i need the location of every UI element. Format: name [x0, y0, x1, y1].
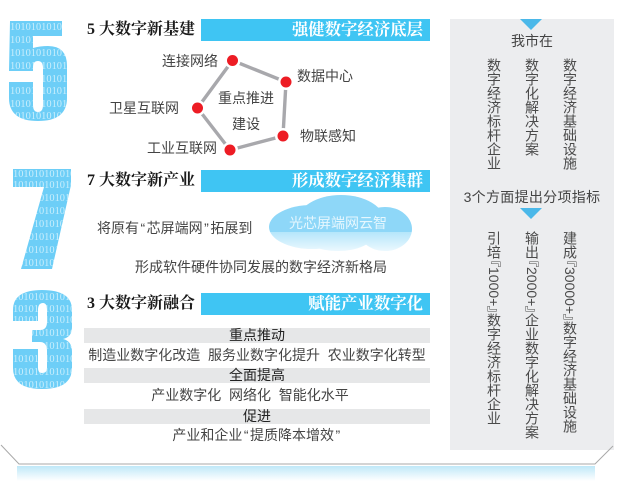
column: 数字经济标杆企业: 数字经济标杆企业 [486, 58, 502, 170]
digit 7 with binary pattern: 1010101010101 [13, 180, 80, 191]
text: 制造业 服务业 农业: 制造业数字化改造 服务业数字化提升 农业数字化转型 [88, 347, 426, 363]
row heading: 重点推动 [84, 328, 430, 343]
digit 7 with binary pattern: 1010101010101 [13, 193, 80, 204]
row heading: 重点推动: 重点推动 [229, 327, 285, 343]
digit 3 with binary pattern: 1010101010101 [13, 304, 80, 315]
banner: 强健数字经济底层: 强健数字经济底层 [292, 20, 423, 39]
center label: 重点推进: 重点推进 [218, 90, 274, 106]
column: 建成30000+数字经济基础设施: 建 成 『30000+ 』 数字经济基础设施 [562, 231, 578, 433]
digit 3 with binary pattern: 1010101010101 [13, 380, 80, 391]
digit 5 with binary pattern: 1010101010101 [10, 99, 78, 110]
digit 3 with binary pattern: 1010101010101 [13, 292, 80, 303]
row heading: 促进: 促进 [243, 408, 271, 424]
text: 形成软件硬件协同发展的数字经济新格局: 形成软件硬件协同发展的数字经济新格局 [135, 259, 387, 275]
column: 引培1000+数字经济标杆企业: 引 培 『1000+ 』 数字经济标杆企业 [486, 231, 502, 425]
digit 7 with binary pattern [13, 169, 71, 269]
digit 5 with binary pattern [9, 21, 67, 121]
row heading: 促进 [84, 409, 430, 424]
banner: 强健数字经济底层 [201, 19, 430, 41]
digit 3 with binary pattern: 1010101010101 [13, 354, 80, 365]
heading: 3 大数字新融合: 3 大数字新融合 [87, 295, 195, 312]
text: 3个方面提出分项指标: 3个方面提出分项指标 [464, 189, 600, 205]
label: 工业互联网: 工业互联网 [147, 140, 217, 156]
label: 卫星互联网: 卫星互联网 [109, 100, 179, 116]
text: 产业数字化 网络化 智能化水平: 产业数字化 网络化 智能化水平 [151, 387, 349, 403]
row heading: 全面提高: 全面提高 [229, 367, 285, 383]
banner: 形成数字经济集群: 形成数字经济集群 [292, 171, 423, 190]
digit 5 with binary pattern: 1010101010101 [10, 111, 78, 122]
digit 7 with binary pattern: 1010101010101 [13, 232, 80, 243]
digit 5 with binary pattern: 1010101010101 [10, 86, 78, 97]
digit 3 with binary pattern [13, 290, 72, 389]
label: 数据中心: 数据中心 [297, 68, 353, 84]
text: 将原有芯屏端网拓展到: 将原有“芯屏端网”拓展到 [97, 220, 252, 236]
row heading: 全面提高 [84, 368, 430, 383]
digit 7 with binary pattern: 1010101010101 [13, 258, 80, 269]
column: 数字经济基础设施: 数字经济基础设施 [562, 58, 578, 170]
column: 输出2000+企业数字化解决方案: 输 出 『2000+ 』 企业数字化解决方案 [524, 231, 540, 439]
label: 连接网络: 连接网络 [162, 53, 218, 69]
digit 7 with binary pattern: 1010101010101 [13, 245, 80, 256]
cloud label: 光芯屏端网云智 [289, 215, 387, 231]
right panel background [450, 19, 614, 450]
label: 物联感知: 物联感知 [300, 128, 356, 144]
banner: 赋能产业数字化 [201, 293, 430, 315]
digit 7 with binary pattern: 1010101010101 [13, 206, 80, 217]
digit 7 with binary pattern: 1010101010101 [13, 169, 80, 180]
text: 产业和企业提质降本增效: 产业和企业“提质降本增效” [172, 427, 340, 443]
text: 我市在: 我市在 [511, 33, 553, 49]
digit 5 with binary pattern: 1010101010101 [10, 74, 78, 85]
cloud [269, 195, 412, 251]
center label: 建设: 建设 [232, 116, 260, 132]
digit 7 with binary pattern: 1010101010101 [13, 219, 80, 230]
banner: 赋能产业数字化: 赋能产业数字化 [308, 294, 423, 313]
column: 数字化解决方案: 数字化解决方案 [524, 58, 540, 156]
digit 3 with binary pattern: 1010101010101 [13, 367, 80, 378]
heading: 5 大数字新基建: 5 大数字新基建 [87, 21, 195, 38]
digit 3 with binary pattern: 1010101010101 [13, 328, 80, 339]
digit 3 with binary pattern: 1010101010101 [13, 315, 80, 326]
digit 5 with binary pattern: 1010101010101 [10, 35, 78, 46]
digit 3 with binary pattern: 1010101010101 [13, 341, 80, 352]
heading: 7 大数字新产业: 7 大数字新产业 [87, 172, 195, 189]
digit 5 with binary pattern: 1010101010101 [10, 48, 78, 59]
digit 5 with binary pattern: 1010101010101 [10, 61, 78, 72]
digit 5 with binary pattern: 1010101010101 [10, 22, 78, 33]
banner: 形成数字经济集群 [201, 170, 430, 192]
